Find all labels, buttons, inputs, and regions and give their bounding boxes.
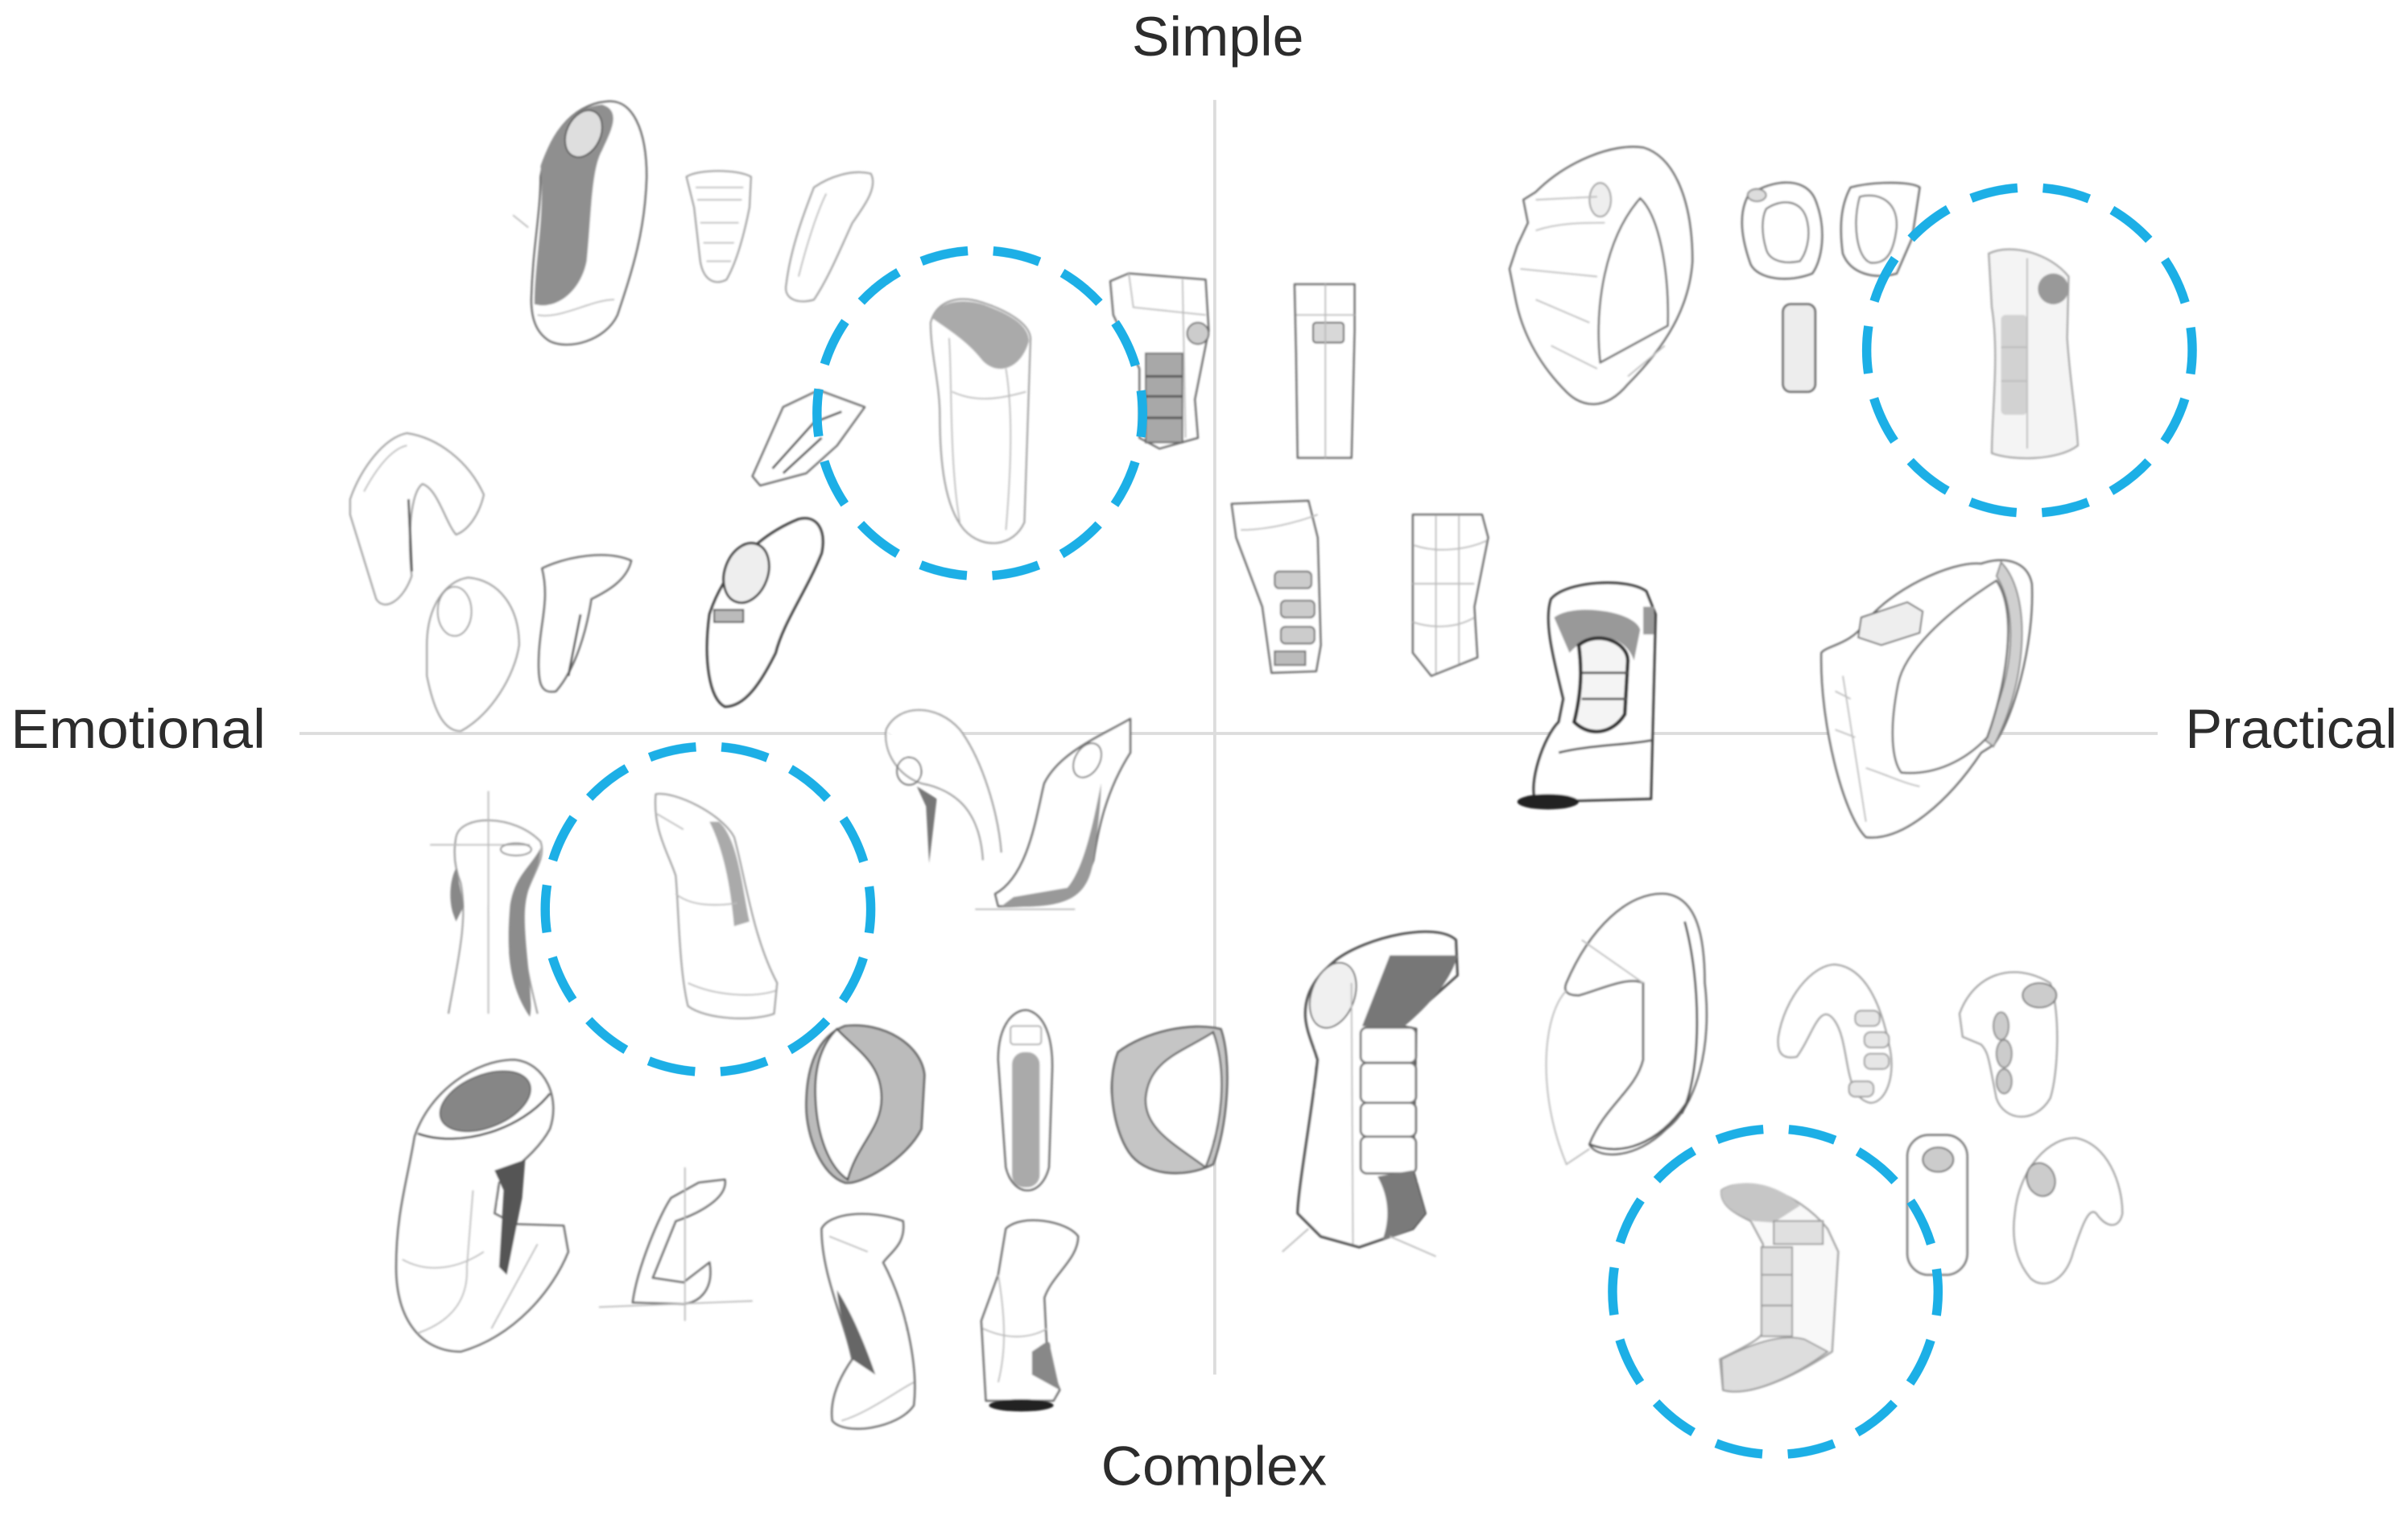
- sketch: circled simple practical concept: [1989, 250, 2078, 458]
- vertical axis: [1214, 100, 1216, 1374]
- sketch: small bar: [1783, 304, 1815, 392]
- sketch: curved ribbed box: [1232, 501, 1320, 673]
- sketch: hook with side button: [1960, 973, 2057, 1117]
- highlight circle: complex practical: [1613, 1129, 1938, 1455]
- sketches: all product concepts: [350, 101, 2122, 1429]
- sketch: slim pill remote: [1907, 1135, 1968, 1274]
- sketch: large dark-head grip on stand: [396, 1060, 568, 1352]
- sketch: circled complex emotional concept: [655, 794, 777, 1018]
- sketch: oval top grip: [427, 577, 519, 731]
- sketch: tall outline grip: [886, 710, 1002, 863]
- sketch: large finger-rib grip: [1282, 931, 1457, 1256]
- sketch: circled simple emotional concept: [931, 299, 1031, 543]
- sketch: pill with gray spine: [998, 1010, 1052, 1190]
- sketch: gray D ring: [806, 1026, 924, 1183]
- axis label: Complex: Complex: [1101, 1435, 1327, 1497]
- sketch: tall box with ribs: [1110, 274, 1208, 448]
- sketch: upright box: [1295, 284, 1354, 458]
- sketch: tall loop grip: [1547, 894, 1707, 1164]
- axis label: Emotional: Emotional: [10, 698, 266, 760]
- sketch: large ring grip: [1510, 147, 1692, 404]
- horizontal axis: [299, 733, 2158, 734]
- sketch: small ribbed head: [687, 171, 751, 282]
- sketch: small ring angled: [1841, 183, 1919, 276]
- sketch: waisted grip with dark base: [981, 1221, 1078, 1411]
- highlight circle: simple practical: [1867, 188, 2192, 513]
- highlight circle: simple emotional: [817, 250, 1142, 576]
- sketch: small ring: [1742, 183, 1822, 279]
- axis label: Simple: Simple: [1132, 6, 1303, 68]
- sketch: two-tone slim body: [430, 791, 542, 1017]
- sketch: trackball grip: [707, 518, 823, 707]
- sketch: hook remote: [2014, 1138, 2122, 1283]
- sketch: arch grip: [350, 433, 484, 605]
- sketch: slim curved grip: [786, 172, 873, 301]
- sketch: grid wireframe box: [1413, 514, 1488, 675]
- sketch: arch with finger keys: [1778, 965, 1891, 1103]
- sketch: gray D ring mirrored: [1112, 1027, 1227, 1173]
- sketch: standing finger grip: [1518, 583, 1655, 809]
- sketch: twisted grip: [822, 1214, 915, 1429]
- sketch: flared base grip: [975, 719, 1130, 909]
- sketch: circled complex practical concept: [1720, 1183, 1838, 1391]
- sketch: wedge: [753, 390, 865, 485]
- sketch: large strap grip: [1821, 560, 2032, 837]
- sketch: L-shaped grip: [599, 1167, 753, 1321]
- highlight circle: complex emotional: [545, 746, 871, 1072]
- axis label: Practical: Practical: [2185, 698, 2398, 760]
- sketch: hook top grip: [539, 555, 631, 692]
- sketch: dark panel shaver: [513, 101, 646, 345]
